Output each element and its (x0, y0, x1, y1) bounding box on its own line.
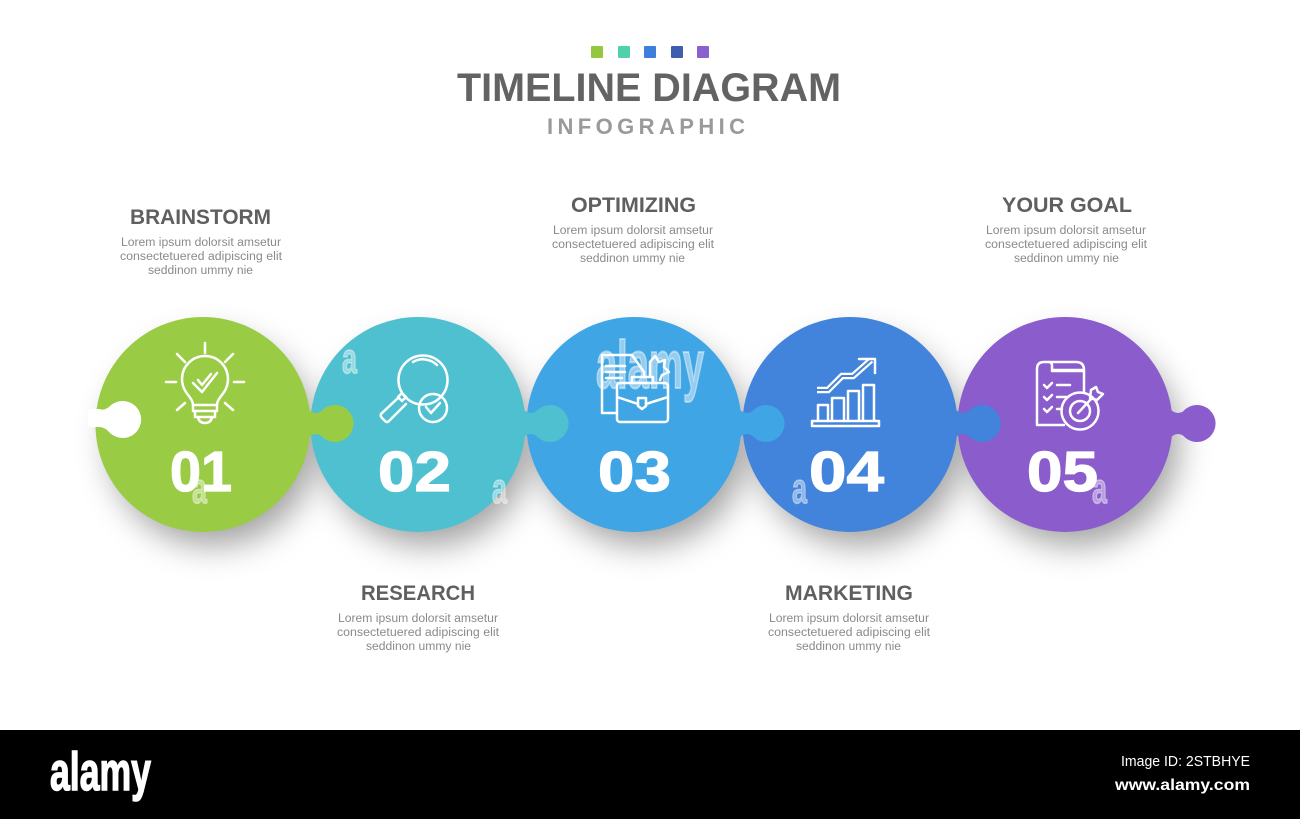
label: marketing: Lorem ipsum dolorsit amsetur (769, 613, 929, 625)
label: brainstorm: seddinon ummy nie (148, 265, 253, 277)
watermarks: a (492, 465, 508, 513)
number 04: 04 (809, 440, 884, 504)
label: your goal: Lorem ipsum dolorsit amsetur (986, 225, 1146, 237)
label: your goal (985, 194, 1148, 265)
step 02: research (310, 317, 569, 532)
label: your goal: YOUR GOAL (1002, 194, 1132, 217)
label: research: Lorem ipsum dolorsit amsetur (338, 613, 498, 625)
website: www.alamy.com (1114, 777, 1250, 794)
watermarks: a (342, 335, 358, 383)
label: brainstorm: consectetuered adipiscing elit (120, 251, 283, 263)
watermarks: a (792, 465, 808, 513)
icon: growth chart (812, 359, 879, 426)
label: research (337, 582, 500, 653)
title: TIMELINE DIAGRAM (457, 66, 841, 110)
label: your goal: seddinon ummy nie (1014, 253, 1119, 265)
notch (88, 401, 141, 438)
watermarks: a (192, 465, 208, 513)
step 04: marketing (742, 317, 1001, 532)
label: optimizing: consectetuered adipiscing elit (552, 239, 715, 251)
label: optimizing (552, 194, 715, 265)
number 05: 05 (1027, 440, 1098, 504)
image id: Image ID: 2STBHYE (1121, 753, 1250, 770)
watermarks (192, 327, 1108, 513)
icon: checklist and target (1037, 362, 1103, 430)
label: marketing (768, 582, 931, 653)
label: marketing: consectetuered adipiscing elit (768, 627, 931, 639)
subtitle: INFOGRAPHIC (547, 114, 745, 139)
number 01: 01 (170, 440, 232, 504)
watermarks: a (1092, 465, 1108, 513)
label: your goal: consectetuered adipiscing elit (985, 239, 1148, 251)
label: optimizing: OPTIMIZING (571, 194, 696, 217)
number 02: 02 (378, 440, 451, 504)
icon: light bulb (166, 343, 244, 423)
label: research: seddinon ummy nie (366, 641, 471, 653)
label: optimizing: Lorem ipsum dolorsit amsetur (553, 225, 713, 237)
label: research: RESEARCH (361, 582, 475, 605)
label: marketing: MARKETING (785, 582, 913, 605)
label: optimizing: seddinon ummy nie (580, 253, 685, 265)
circle shadows (109, 338, 1179, 546)
footer bar (0, 730, 1300, 819)
watermarks: alamy (596, 327, 704, 403)
footer logo: alamy (50, 742, 151, 802)
label: marketing: seddinon ummy nie (796, 641, 901, 653)
colour squares (591, 46, 709, 58)
label: brainstorm: Lorem ipsum dolorsit amsetur (121, 237, 281, 249)
label: research: consectetuered adipiscing elit (337, 627, 500, 639)
icon: magnifier with check (381, 356, 448, 422)
step 03: optimizing (526, 317, 785, 532)
step 01: brainstorm (88, 317, 354, 532)
icon: briefcase and documents (602, 355, 669, 422)
number 03: 03 (598, 440, 671, 504)
label: brainstorm (120, 206, 283, 277)
step 05: your goal (958, 317, 1216, 532)
label: brainstorm: BRAINSTORM (130, 206, 271, 229)
